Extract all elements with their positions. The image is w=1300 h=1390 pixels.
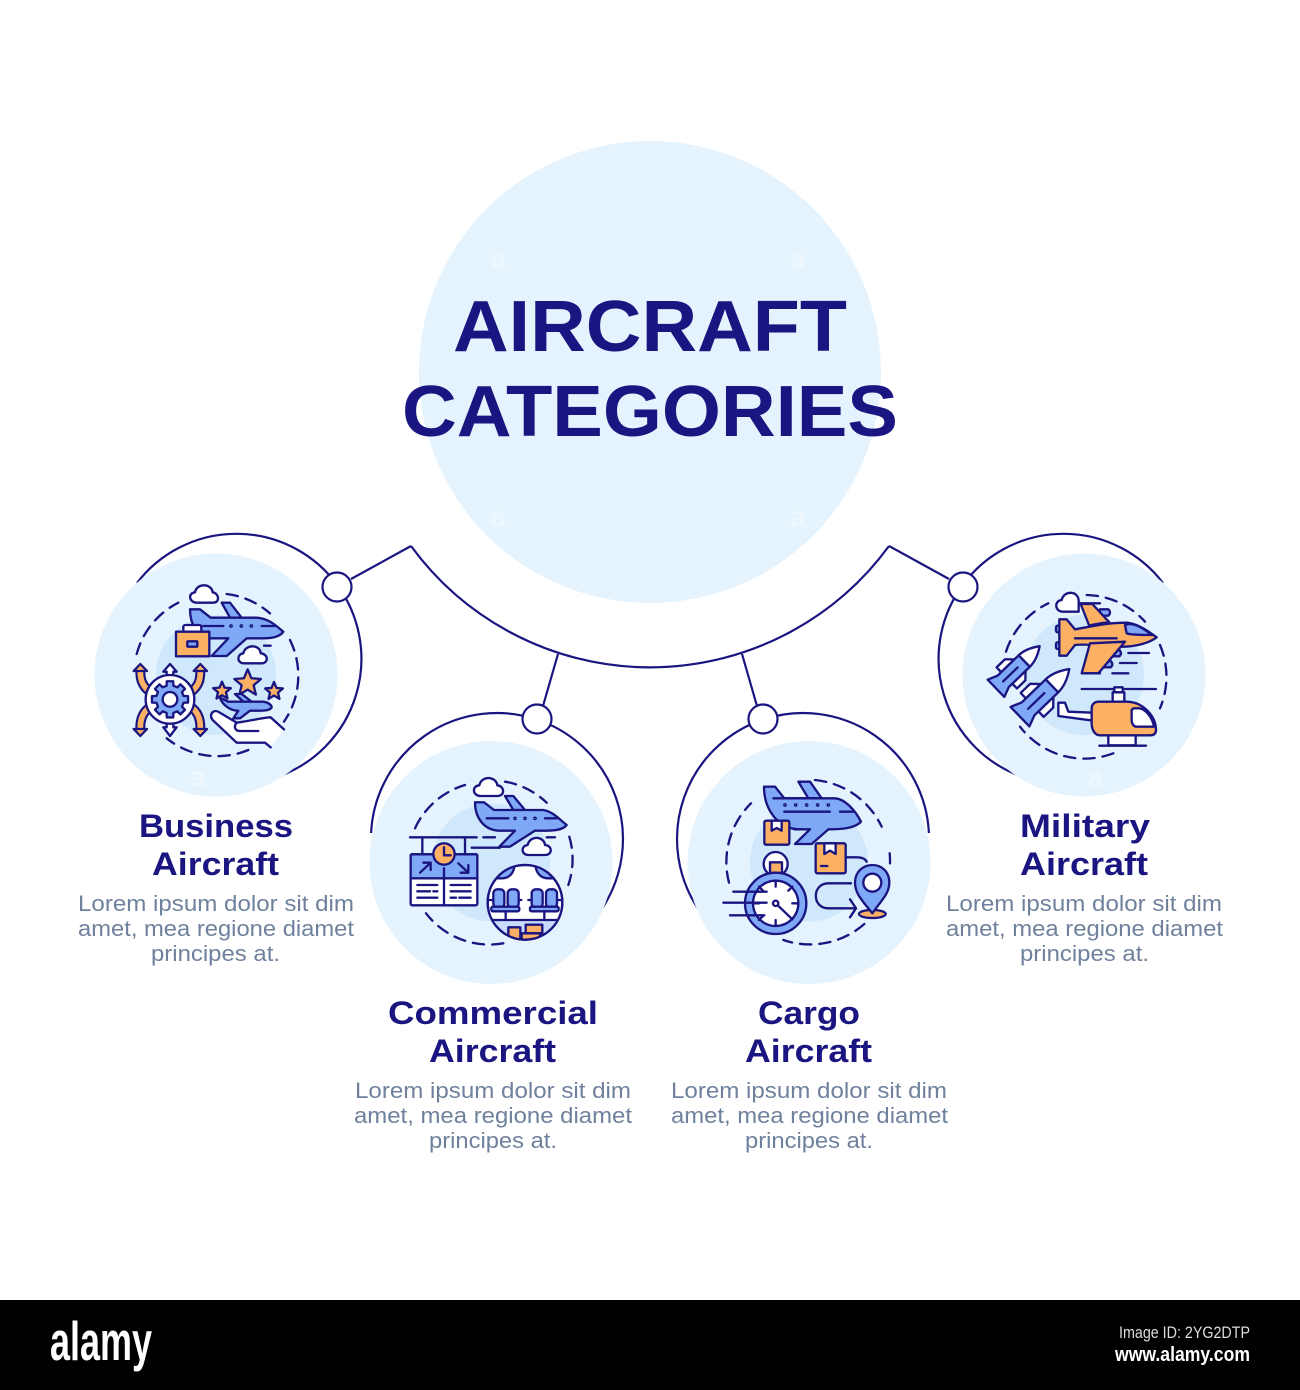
footer logo: alamy bbox=[50, 1310, 152, 1372]
description: commercial aircraft bbox=[354, 1078, 632, 1153]
description: commercial aircraft: Lorem ipsum dolor sit dim bbox=[355, 1078, 631, 1103]
inner disc: commercial bbox=[432, 804, 550, 922]
description: cargo aircraft: principes at. bbox=[745, 1128, 873, 1153]
disc: cargo bbox=[688, 741, 930, 984]
item: business aircraft bbox=[78, 534, 361, 966]
label: commercial aircraft bbox=[388, 995, 598, 1069]
watermark marks: a bbox=[190, 761, 206, 792]
footer image id: Image ID: 2YG2DTP bbox=[1119, 1323, 1250, 1342]
node: commercial bbox=[522, 704, 552, 734]
item: military aircraft bbox=[939, 534, 1223, 966]
description: business aircraft bbox=[78, 891, 354, 966]
ring: business bbox=[137, 534, 361, 776]
label: commercial aircraft: Commercial bbox=[388, 995, 598, 1031]
ring: commercial bbox=[371, 713, 623, 908]
footer image id: www.alamy.com bbox=[1114, 1344, 1250, 1366]
footer bar bbox=[0, 1300, 1300, 1390]
label: military aircraft: Aircraft bbox=[1020, 846, 1148, 882]
node: military bbox=[948, 572, 978, 602]
title: AIRCRAFT bbox=[453, 287, 847, 367]
icon: business aircraft bbox=[134, 585, 298, 756]
disc: military bbox=[962, 554, 1206, 796]
label: business aircraft bbox=[139, 808, 293, 882]
description: commercial aircraft: principes at. bbox=[429, 1128, 557, 1153]
item: commercial aircraft bbox=[354, 704, 632, 1153]
label: military aircraft bbox=[1020, 808, 1150, 882]
icon: military aircraft bbox=[986, 593, 1166, 759]
icon: cargo aircraft bbox=[723, 780, 890, 944]
inner disc: military bbox=[1024, 615, 1144, 735]
description: cargo aircraft: amet, mea regione diamet bbox=[671, 1103, 948, 1128]
title bbox=[402, 287, 898, 452]
inner disc: business bbox=[156, 615, 276, 735]
description: military aircraft bbox=[946, 891, 1223, 966]
watermark marks: a bbox=[490, 501, 506, 532]
disc: business bbox=[94, 554, 338, 796]
label: cargo aircraft: Aircraft bbox=[745, 1033, 872, 1069]
disc: commercial bbox=[370, 741, 612, 984]
node: business bbox=[322, 572, 352, 602]
connector network bbox=[351, 546, 949, 706]
title: CATEGORIES bbox=[402, 372, 898, 452]
watermark marks: a bbox=[790, 501, 806, 532]
description: business aircraft: amet, mea regione diamet bbox=[78, 916, 354, 941]
description: military aircraft: principes at. bbox=[1020, 941, 1149, 966]
central circle bbox=[419, 141, 881, 603]
icon: commercial aircraft bbox=[410, 778, 573, 945]
label: commercial aircraft: Aircraft bbox=[429, 1033, 556, 1069]
inner disc: cargo bbox=[750, 804, 868, 922]
label: business aircraft: Business bbox=[139, 808, 293, 844]
label: military aircraft: Military bbox=[1020, 808, 1150, 844]
ring: cargo bbox=[677, 713, 929, 908]
ring: military bbox=[939, 534, 1163, 776]
watermark marks: a bbox=[790, 243, 806, 274]
description: business aircraft: Lorem ipsum dolor sit dim bbox=[78, 891, 354, 916]
label: cargo aircraft: Cargo bbox=[758, 995, 860, 1031]
watermark marks: a bbox=[490, 243, 506, 274]
description: cargo aircraft: Lorem ipsum dolor sit dim bbox=[671, 1078, 947, 1103]
watermark marks: a bbox=[1088, 761, 1104, 792]
item: cargo aircraft bbox=[671, 704, 948, 1153]
label: cargo aircraft bbox=[745, 995, 872, 1069]
description: business aircraft: principes at. bbox=[151, 941, 280, 966]
footer image id bbox=[1114, 1323, 1250, 1366]
node: cargo bbox=[748, 704, 778, 734]
label: business aircraft: Aircraft bbox=[152, 846, 279, 882]
description: commercial aircraft: amet, mea regione diamet bbox=[354, 1103, 632, 1128]
description: military aircraft: amet, mea regione diamet bbox=[946, 916, 1223, 941]
description: cargo aircraft bbox=[671, 1078, 948, 1153]
watermark marks bbox=[190, 243, 1104, 792]
description: military aircraft: Lorem ipsum dolor sit dim bbox=[946, 891, 1222, 916]
